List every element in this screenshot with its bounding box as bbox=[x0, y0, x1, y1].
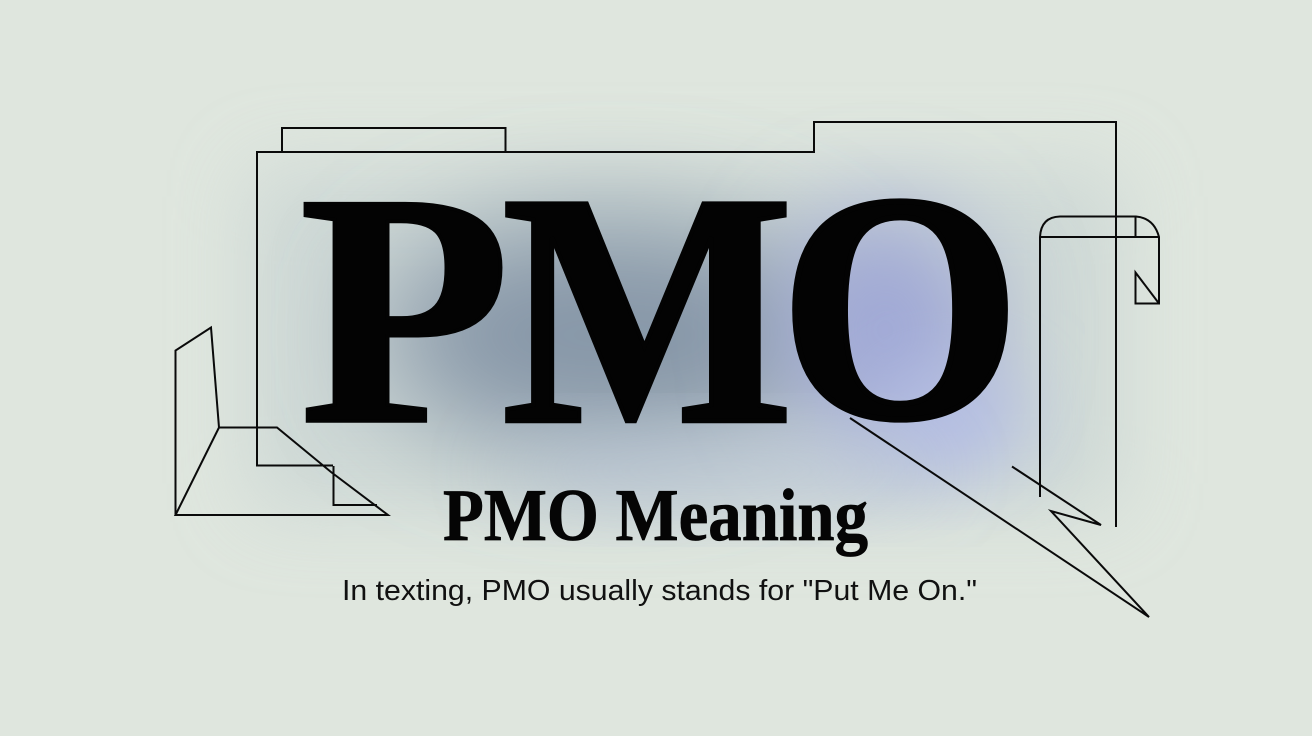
title: PMO: M bbox=[502, 126, 793, 493]
folder outline bbox=[257, 122, 1116, 527]
heading: PMO Meaning: PMO Meaning bbox=[443, 475, 868, 557]
title: PMO bbox=[300, 126, 1020, 494]
icon: left folded shape bbox=[176, 328, 388, 515]
title: PMO: P bbox=[300, 126, 510, 494]
icon: right page corner bbox=[1040, 216, 1159, 497]
subtitle: In texting, PMO usually stands for "Put Me On." bbox=[342, 575, 977, 607]
title: PMO: O bbox=[780, 127, 1020, 487]
speech bubble tail bbox=[850, 418, 1149, 617]
background glow bbox=[250, 170, 1120, 510]
